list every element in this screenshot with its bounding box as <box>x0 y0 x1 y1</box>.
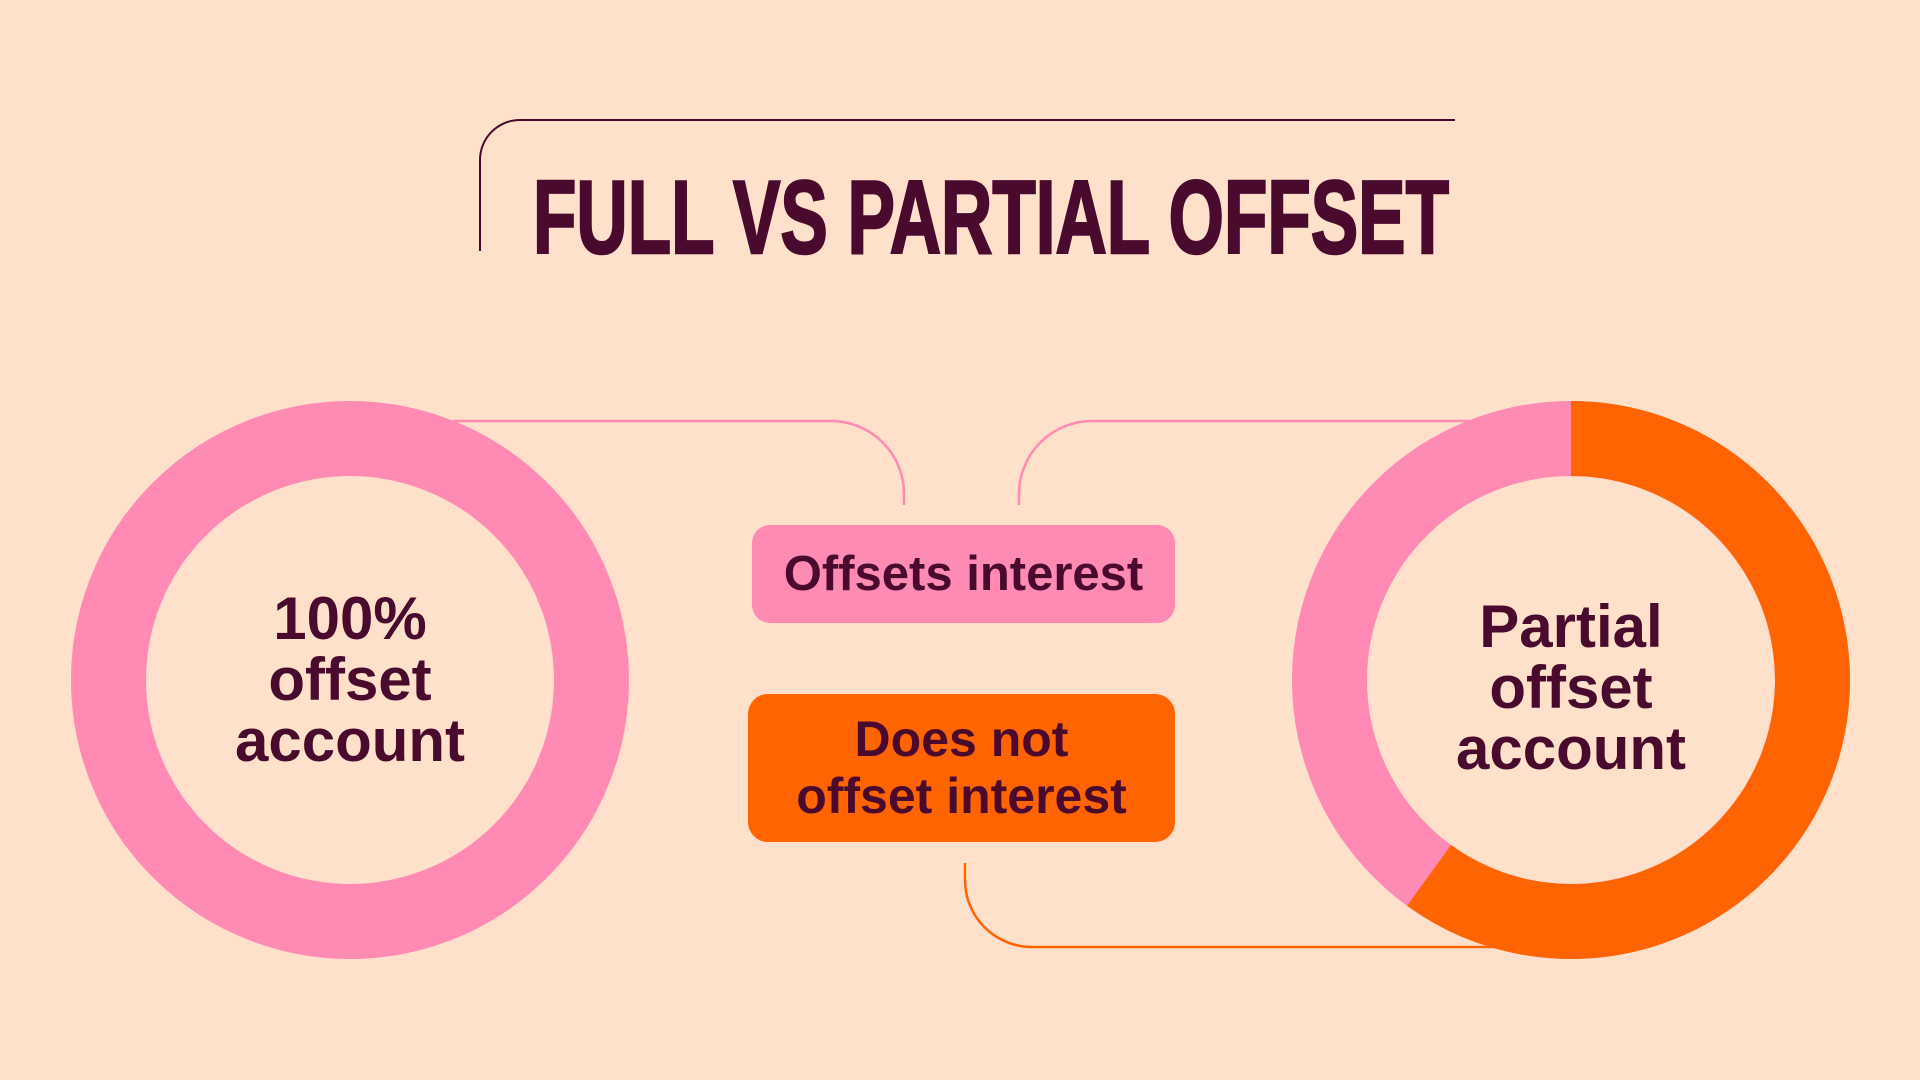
label: 100% offset account: 100% <box>273 585 427 652</box>
box: offsets interest <box>752 525 1175 623</box>
chart: partial offset donut <box>1292 401 1850 959</box>
chart: full offset donut <box>71 401 629 959</box>
label: 100% offset account: offset <box>268 646 432 713</box>
connector: offsets interest to right donut <box>1019 421 1469 505</box>
label: 100% offset account: account <box>235 707 465 774</box>
connector: does not offset to right donut <box>965 863 1494 947</box>
label: 100% offset account <box>235 585 465 774</box>
title: FULL VS PARTIAL OFFSET <box>533 160 1449 276</box>
label: partial offset account: offset <box>1489 654 1653 721</box>
connector: left donut to offsets interest <box>453 421 904 505</box>
box: does not offset interest: Does not <box>855 711 1068 767</box>
title bracket <box>480 120 1455 251</box>
box: offsets interest: Offsets interest <box>784 547 1143 601</box>
box: does not offset interest: offset interest <box>796 768 1127 824</box>
box: does not offset interest <box>748 694 1175 842</box>
label: partial offset account: Partial <box>1479 593 1663 660</box>
label: partial offset account <box>1456 593 1686 782</box>
label: partial offset account: account <box>1456 715 1686 782</box>
